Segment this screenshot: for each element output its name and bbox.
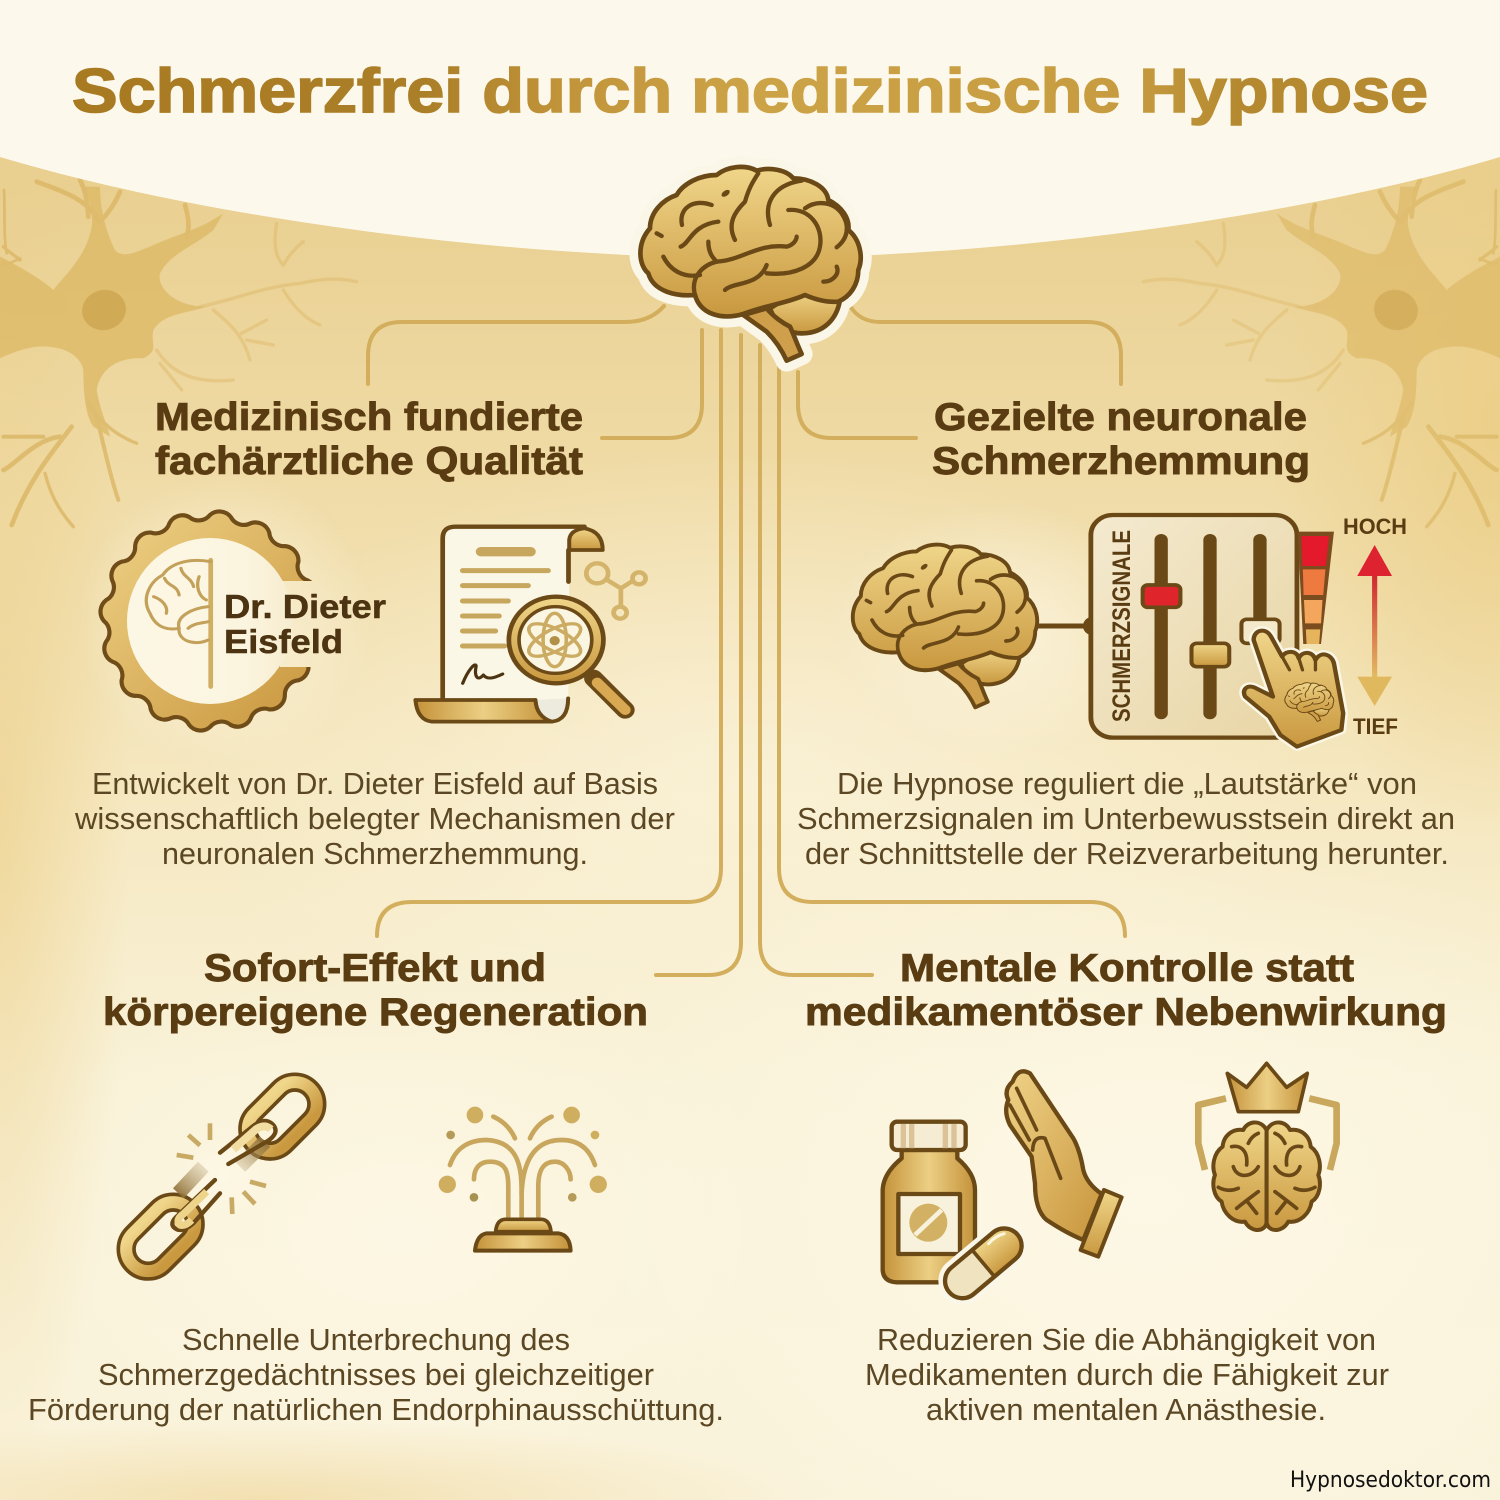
document sheet	[443, 527, 584, 703]
broken link lower fragment	[178, 1167, 203, 1193]
seal ring	[100, 511, 320, 731]
heading: neural inhibition: Schmerzhemmung	[932, 440, 1310, 483]
text: reducing dependence: aktiven mentalen Anästhesie.	[926, 1392, 1326, 1427]
connector: top left bracket	[368, 306, 664, 384]
left hemisphere	[1213, 1122, 1267, 1230]
label: tief: TIEF	[1353, 714, 1398, 739]
crown	[1227, 1063, 1307, 1112]
text: hypnosis regulation: Die Hypnose reguliert die „Lautstärke“ von	[837, 766, 1417, 801]
text: hypnosis regulation	[797, 766, 1455, 871]
signature	[463, 665, 503, 683]
neuron illustration right	[1143, 180, 1500, 527]
text: development: wissenschaftlich belegter Mechanismen der	[74, 801, 675, 836]
palm and fingers	[1006, 1071, 1102, 1240]
icon: brain with crown and shield	[1198, 1063, 1337, 1230]
icon: endorphin fountain	[439, 1107, 607, 1251]
icon: Dr. Dieter Eisfeld seal	[98, 496, 386, 733]
text: interruption of pain memory: Schnelle Unterbrechung des	[182, 1322, 570, 1357]
icon: stop hand	[1006, 1071, 1122, 1257]
text: development: neuronalen Schmerzhemmung.	[162, 836, 588, 871]
connector: heading four bracket	[779, 365, 1125, 936]
finger lines	[1010, 1088, 1061, 1178]
bottom scroll	[535, 698, 568, 722]
hand pressing slider	[1244, 631, 1343, 747]
icon: pain signal mixer	[1091, 515, 1392, 747]
text: interruption of pain memory: Förderung der natürlichen Endorphinausschüttung.	[28, 1392, 724, 1427]
lower chain link	[117, 1193, 204, 1280]
mixer panel	[1091, 515, 1297, 738]
cuff	[1081, 1190, 1122, 1257]
connector: heading two	[798, 372, 916, 438]
neuron illustration left	[0, 180, 357, 527]
molecule	[586, 563, 646, 619]
seal name: Dr. Dieter	[224, 588, 386, 625]
level arrow	[1372, 576, 1377, 677]
text: interruption of pain memory	[28, 1322, 724, 1427]
icon: brain with connector to mixer	[830, 500, 1170, 760]
heading: mental control: Mentale Kontrolle statt	[900, 947, 1354, 990]
icon: scientific document with magnifier	[415, 527, 646, 722]
red slider knob	[1143, 585, 1180, 607]
heading: mental control	[805, 947, 1447, 1034]
magnifier	[594, 678, 625, 710]
document text lines	[463, 552, 548, 646]
text: development	[74, 766, 675, 871]
heading: medical quality	[155, 396, 583, 483]
icon: medicine bottle and capsule	[883, 1122, 1031, 1308]
bottle cap	[892, 1122, 966, 1150]
flash glow	[183, 1135, 263, 1215]
half brain emblem	[146, 560, 211, 687]
text: reducing dependence: Medikamenten durch die Fähigkeit zur	[865, 1357, 1389, 1392]
central brain icon	[640, 167, 861, 361]
text: reducing dependence	[865, 1322, 1389, 1427]
connector: top right bracket	[850, 306, 1121, 384]
heading: neural inhibition	[932, 396, 1310, 483]
text: hypnosis regulation: Schmerzsignalen im Unterbewusstsein direkt an	[797, 801, 1455, 836]
slider tracks	[1161, 540, 1260, 713]
bottle label	[898, 1194, 960, 1254]
intensity bar	[1298, 532, 1334, 644]
heading: immediate effect: körpereigene Regeneration	[103, 991, 648, 1034]
text: hypnosis regulation: der Schnittstelle der Reizverarbeitung herunter.	[805, 836, 1449, 871]
capsule	[935, 1219, 1031, 1308]
label: schmerzsignale: SCHMERZSIGNALE	[1108, 530, 1136, 722]
gold slider knob	[1192, 643, 1229, 667]
sparks	[177, 1123, 266, 1214]
heading: mental control: medikamentöser Nebenwirkung	[805, 991, 1447, 1034]
text: development: Entwickelt von Dr. Dieter Eisfeld auf Basis	[92, 766, 658, 801]
bottle body	[883, 1150, 975, 1282]
title: Schmerzfrei durch medizinische Hypnose	[72, 57, 1428, 126]
fountain droplets	[439, 1107, 607, 1202]
top cream arc	[0, 0, 1500, 258]
connector: heading three	[656, 335, 741, 975]
connector lines	[368, 306, 1125, 975]
fountain jets	[450, 1117, 595, 1217]
heading: immediate effect	[103, 947, 648, 1034]
icon: broken chain	[117, 1073, 326, 1280]
heading: immediate effect: Sofort-Effekt und	[204, 947, 546, 990]
heading: medical quality: fachärztliche Qualität	[155, 440, 583, 483]
touched slider knob	[1241, 619, 1280, 643]
heading: neural inhibition: Gezielte neuronale	[934, 396, 1307, 439]
connector: heading one	[602, 330, 702, 438]
fountain base	[496, 1219, 551, 1232]
shield sides	[1198, 1098, 1226, 1170]
broken link upper fragment	[240, 1142, 265, 1167]
text: interruption of pain memory: Schmerzgedächtnisses bei gleichzeitiger	[98, 1357, 654, 1392]
connector: heading three bracket	[377, 330, 721, 936]
atom	[524, 613, 586, 667]
icon: Dr. Dieter Eisfeld seal: Eisfeld	[224, 623, 343, 660]
tablet	[909, 1204, 947, 1242]
text: reducing dependence: Reduzieren Sie die Abhängigkeit von	[877, 1322, 1376, 1357]
heading: medical quality: Medizinisch fundierte	[155, 396, 583, 439]
label: hoch: HOCH	[1343, 514, 1407, 539]
right hemisphere	[1267, 1122, 1320, 1230]
connector: heading four	[760, 345, 872, 975]
upper chain link	[239, 1073, 326, 1160]
